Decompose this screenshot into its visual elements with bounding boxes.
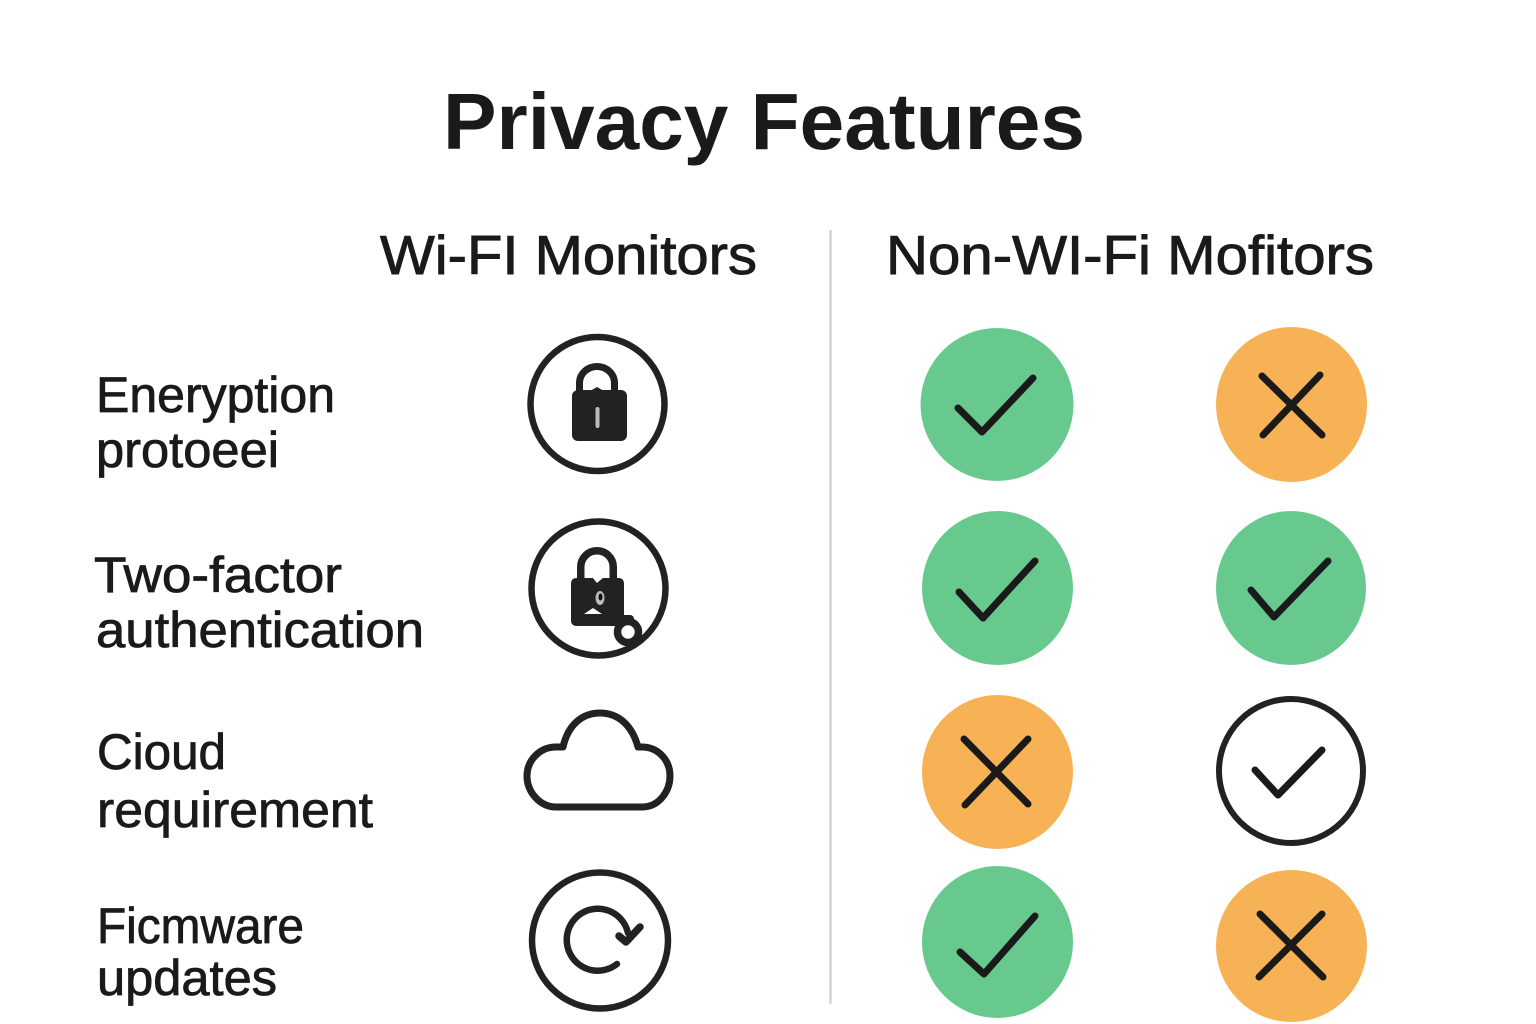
column heading: Wi-Fi monitors: Wi-FI Monitors [380,224,757,286]
status: cloud, Wi-Fi cross [922,695,1073,849]
row label: two-factor authentication: authentication [96,602,424,658]
row label: encryption protocol [96,367,335,478]
title: Privacy Features [443,77,1085,166]
row label: two-factor authentication: Two-factor [94,547,342,603]
icon: refresh arrow in circle [532,872,668,1008]
row label: cloud requirement [97,724,373,838]
row label: cloud requirement: requirement [97,782,373,838]
status: firmware, non-Wi-Fi cross [1216,870,1367,1022]
status: firmware, Wi-Fi check [922,866,1073,1018]
row label: firmware updates: updates [97,950,277,1006]
row label: cloud requirement: Cioud [97,724,226,780]
row label: encryption protocol: Eneryption [96,367,335,423]
status: encryption, Wi-Fi check [920,328,1074,481]
status: two-factor, Wi-Fi check [922,511,1073,665]
status: encryption, non-Wi-Fi cross [1216,327,1367,482]
row label: two-factor authentication [94,547,424,658]
row label: encryption protocol: protoeei [96,422,279,478]
column heading: non-Wi-Fi monitors: Non-WI-Fi Mofitors [886,224,1374,286]
icon: padlock in circle [530,337,664,471]
status: two-factor, non-Wi-Fi check [1216,511,1366,665]
row label: firmware updates [97,898,304,1006]
status: cloud, non-Wi-Fi outlined check [1219,699,1363,843]
row label: firmware updates: Ficmware [97,898,304,954]
icon: padlock with key in circle [532,522,666,656]
icon: cloud [527,713,670,807]
